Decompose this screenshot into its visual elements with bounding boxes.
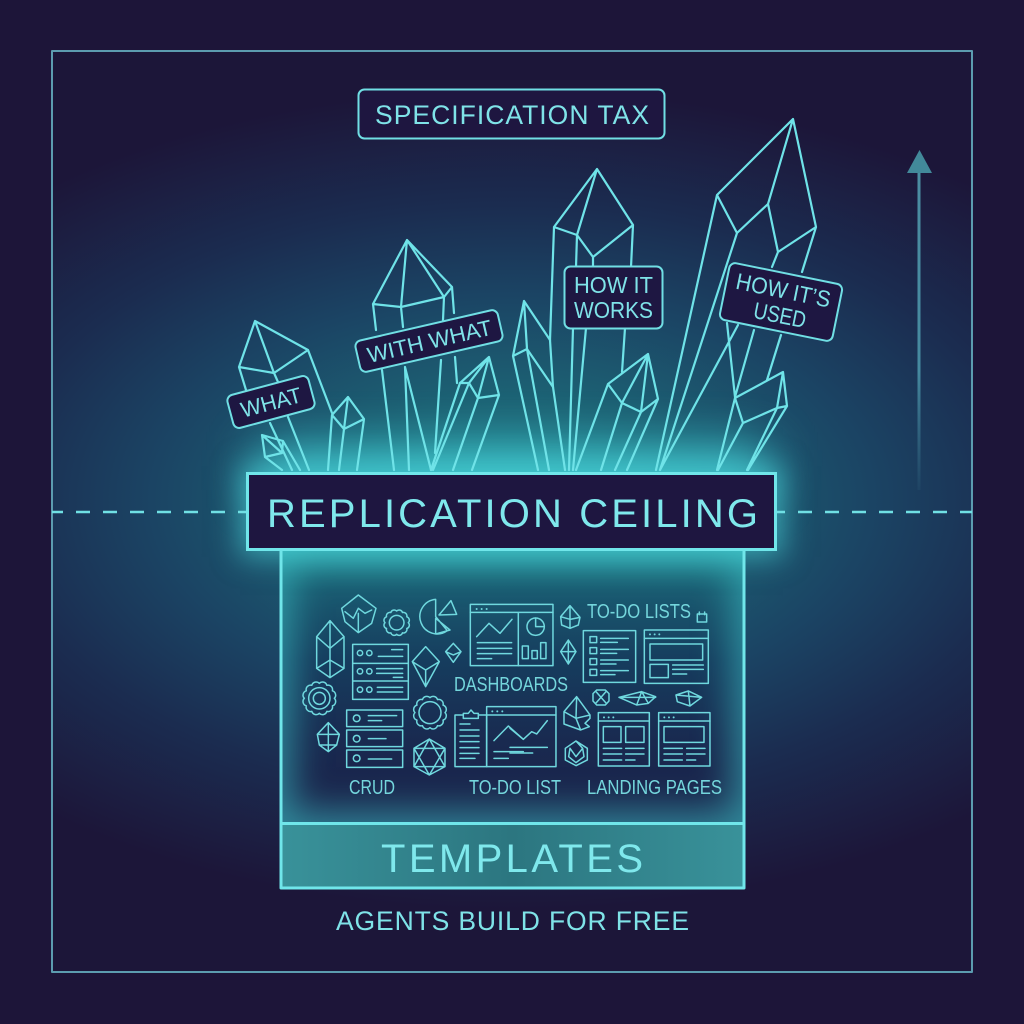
icon collage left bbox=[303, 595, 556, 775]
label: how it works: HOW IT bbox=[574, 272, 653, 298]
icon: long crystal bbox=[619, 692, 656, 705]
crystal: how it's used, small bbox=[717, 372, 787, 470]
icon: small crystal bbox=[561, 606, 580, 628]
icon: small diamond bbox=[446, 643, 461, 662]
label: how it works bbox=[564, 266, 662, 328]
icon: landing page window one bbox=[598, 713, 649, 766]
icon: narrow diamond bbox=[561, 640, 576, 664]
replication ceiling dashed line bbox=[52, 511, 972, 513]
arrow: rising specification tax bbox=[907, 150, 932, 490]
crystal: how it works, side bbox=[513, 301, 553, 470]
icon: diamond bbox=[412, 647, 439, 687]
label: how it's used: HOW IT’S bbox=[734, 268, 833, 313]
label: what bbox=[226, 375, 316, 429]
icon: crud stack bbox=[347, 710, 403, 767]
crystal: what bbox=[239, 321, 332, 470]
icon: clipboard and chart bbox=[455, 707, 556, 767]
icon: checklist window bbox=[583, 631, 636, 682]
label: what: WHAT bbox=[238, 382, 304, 423]
templates band fill bbox=[280, 823, 745, 889]
label: how it's used: USED bbox=[751, 297, 808, 333]
icon: page window bbox=[644, 630, 708, 683]
icon collage right bbox=[510, 606, 710, 766]
labels inside template box bbox=[349, 601, 722, 799]
icon: medium gear bbox=[414, 696, 446, 729]
icon: tall crystal bbox=[317, 621, 344, 678]
label: how it works: WORKS bbox=[574, 297, 653, 323]
crystals bbox=[239, 119, 816, 470]
icon: small gear bbox=[384, 610, 409, 635]
icon: hex crystal bbox=[565, 741, 587, 766]
icon: polyhedron bbox=[414, 739, 445, 775]
icon: chart continuation bbox=[510, 721, 547, 753]
heading: replication ceiling: REPLICATION CEILING bbox=[267, 492, 758, 536]
icon: tiny calendar bbox=[697, 612, 707, 622]
icon: broken crystal bbox=[564, 697, 590, 730]
icon: stubby crystal bbox=[676, 691, 702, 706]
label: crud: CRUD bbox=[349, 777, 395, 799]
icon: window header dots right bbox=[603, 633, 675, 718]
label: to-do lists: TO-DO LISTS bbox=[587, 601, 691, 623]
glow behind ceiling bbox=[258, 448, 766, 492]
panel: templates box background bbox=[280, 551, 745, 823]
icon: crystal with question bbox=[342, 595, 376, 633]
crystal: how it's used bbox=[656, 119, 816, 470]
crystal: small left bbox=[328, 397, 364, 470]
ceiling bar background bbox=[246, 472, 777, 551]
icon: pie chart bbox=[420, 599, 457, 634]
icon: round crystal bbox=[593, 690, 609, 705]
crystal: how it works bbox=[550, 169, 633, 470]
icon: dashboard window bbox=[470, 604, 553, 666]
crystal: how it works, small bbox=[576, 354, 658, 470]
title: specification tax bbox=[358, 90, 664, 138]
label: to-do list: TO-DO LIST bbox=[469, 777, 561, 799]
icon: window header dots bbox=[476, 608, 503, 712]
panel outline: templates bbox=[281, 551, 744, 888]
title: specification tax: SPECIFICATION TAX bbox=[375, 100, 649, 130]
label: with what: WITH WHAT bbox=[365, 315, 494, 368]
crystal: with what, small bbox=[431, 357, 499, 470]
icon: large gear bbox=[303, 682, 336, 715]
label: dashboards: DASHBOARDS bbox=[454, 674, 568, 696]
heading: templates: TEMPLATES bbox=[381, 837, 643, 881]
icon: crystal shield bbox=[317, 723, 339, 752]
icon: landing page window two bbox=[659, 713, 710, 766]
crystal: with what bbox=[373, 240, 457, 470]
label: landing pages: LANDING PAGES bbox=[587, 777, 722, 799]
label: how it's used bbox=[719, 262, 843, 342]
icon: server stack bbox=[353, 644, 408, 699]
caption: agents build for free: AGENTS BUILD FOR FREE bbox=[336, 906, 689, 936]
